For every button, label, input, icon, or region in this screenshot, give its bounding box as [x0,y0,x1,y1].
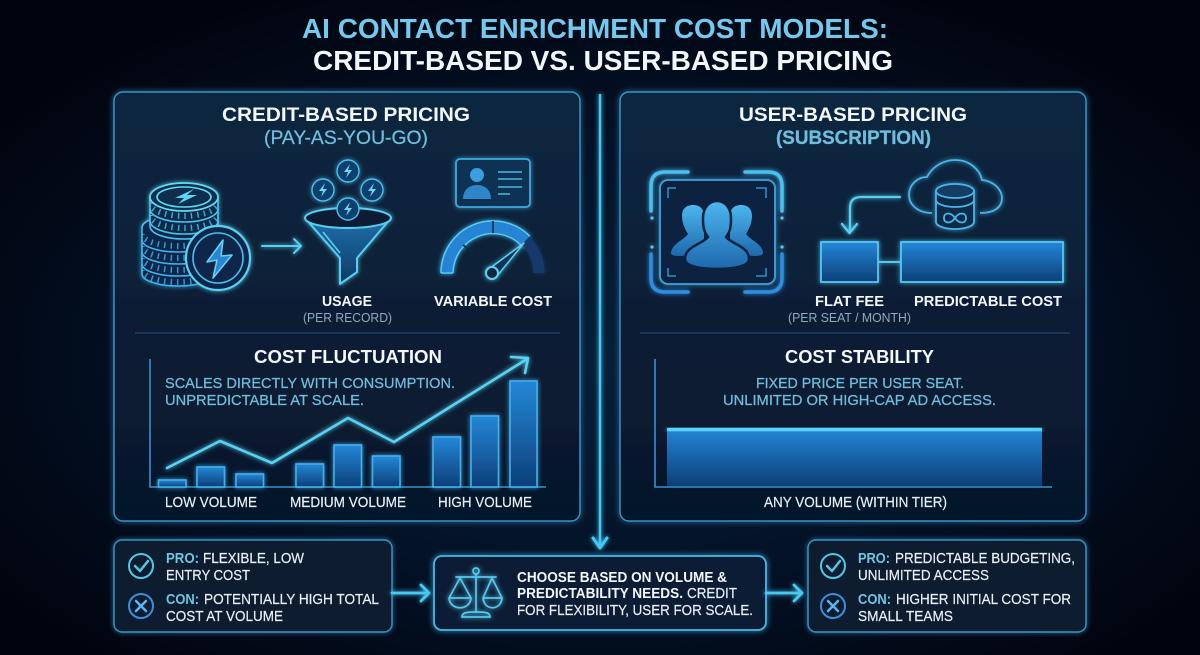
title: AI CONTACT ENRICHMENT COST MODELS: [302,13,888,44]
arrow: decision to user [766,585,802,601]
text: user con: SMALL TEAMS [858,609,953,625]
heading: cost stability: COST STABILITY [785,346,935,367]
text: decision guidance: CREDIT [687,586,737,602]
axis labels: volume tiers [165,495,532,511]
heading: user-based pricing: USER-BASED PRICING [739,104,967,126]
title [302,13,893,76]
arrow: cloud to flat fee [842,197,900,233]
icon: gauge [441,221,539,279]
axis labels: volume tiers: LOW VOLUME [165,495,257,511]
panel: credit pros and cons [114,540,392,632]
panel: user pros and cons [808,540,1086,632]
text: stability description [723,375,996,409]
text: scaling description: SCALES DIRECTLY WITH CONSUMPTION. [165,375,455,392]
icon: id card [456,159,530,207]
icon: cross [821,594,845,618]
text: user con: CON: [858,592,891,608]
label: usage: USAGE [322,293,372,310]
text: scaling description: UNPREDICTABLE AT SCALE. [165,392,364,409]
icon: funnel with coins [305,160,391,284]
text: user pro: PRO: [858,551,890,567]
text: stability description: UNLIMITED OR HIGH-CAP AD ACCESS. [723,392,996,409]
panel: credit-based pricing [114,92,580,521]
text: credit pro [166,551,304,584]
text: decision guidance [517,570,753,619]
icon: check [129,554,153,578]
heading: credit-based pricing: CREDIT-BASED PRICING [222,104,470,126]
text: credit con [166,592,379,625]
icon: user group in frame [650,172,784,292]
panel: decision guidance [434,556,766,630]
text: user pro: UNLIMITED ACCESS [858,568,989,584]
subheading: pay-as-you-go: (PAY-AS-YOU-GO) [264,128,428,149]
arrow: coins to usage [262,239,301,253]
arrow: rising cost line [167,357,528,468]
text: user pro: PREDICTABLE BUDGETING, [895,551,1075,567]
text: credit pro: ENTRY COST [166,568,250,584]
text: credit con: COST AT VOLUME [166,609,283,625]
text: credit con: CON: [166,592,199,608]
text: decision guidance: CHOOSE BASED ON VOLUME & [517,570,727,586]
subheading: subscription: (SUBSCRIPTION) [776,128,931,149]
text: decision guidance: FOR FLEXIBILITY, USER FOR SCALE. [517,603,753,619]
arrow: central divider [593,94,607,548]
axis labels: volume tiers: HIGH VOLUME [438,495,532,511]
icon: cloud database [909,160,1002,229]
chart: cost fluctuation bars [150,357,546,487]
chart: flat cost bar [655,359,1052,487]
axis label: any volume: ANY VOLUME (WITHIN TIER) [764,495,947,511]
icon: coin stack [142,183,250,290]
text: user pro [858,551,1075,584]
heading: cost fluctuation: COST FLUCTUATION [254,346,442,367]
text: decision guidance: PREDICTABILITY NEEDS. [517,586,683,602]
chart: flat fee and predictable cost bars [821,242,1063,282]
label: predictable cost: PREDICTABLE COST [914,293,1062,310]
label: per record: (PER RECORD) [303,310,392,325]
icon: balance scales [449,568,502,617]
text: credit con: POTENTIALLY HIGH TOTAL [204,592,379,608]
label: variable cost: VARIABLE COST [434,293,552,310]
title: CREDIT-BASED VS. USER-BASED PRICING [313,45,893,76]
text: user con [858,592,1071,625]
icon: check [821,554,845,578]
label: flat fee: FLAT FEE [815,293,884,310]
panel: user-based pricing [620,92,1086,521]
arrow: credit to decision [392,585,429,601]
label: per seat per month: (PER SEAT / MONTH) [788,310,911,325]
text: scaling description [165,375,455,409]
text: user con: HIGHER INITIAL COST FOR [896,592,1071,608]
axis labels: volume tiers: MEDIUM VOLUME [290,495,406,511]
icon: cross [129,594,153,618]
text: credit pro: PRO: [166,551,199,567]
text: credit pro: FLEXIBLE, LOW [203,551,304,567]
text: stability description: FIXED PRICE PER USER SEAT. [756,375,964,392]
